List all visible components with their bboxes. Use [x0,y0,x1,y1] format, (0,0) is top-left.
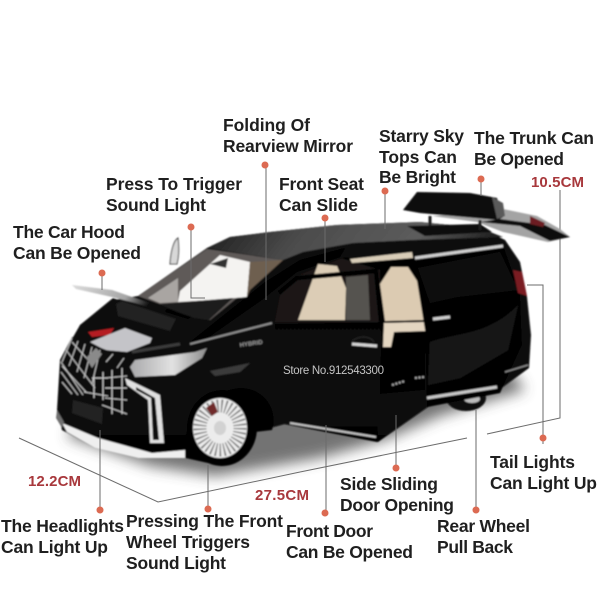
callout: trunk [474,128,594,169]
engine bay [80,298,198,357]
callout: starry sky [379,126,464,187]
callout: folding mirror [223,115,353,156]
rear view mirror patch [210,258,228,268]
callout: starry sky: Tops Can [379,147,457,167]
dimension: width: 12.2CM [28,473,81,490]
callout: front door: Can Be Opened [286,542,413,562]
windshield [138,249,283,320]
callout: front wheel: Sound Light [126,553,226,573]
icon: hybrid badge text: HYBRID [239,340,264,349]
roof [207,222,503,260]
callout: sliding door [340,474,454,515]
leader: hood [98,270,106,290]
front bumper chrome [62,423,185,458]
callout: headlights: Can Light Up [1,537,108,557]
trunk lid [403,192,570,242]
callout: folding mirror: Folding Of [223,115,310,135]
callout: starry sky: Be Bright [379,167,456,187]
fender reflection [210,363,250,376]
hood lid [72,285,192,319]
callout: trunk: The Trunk Can [474,128,594,148]
icon: side mirror folded [170,238,179,264]
dashboard [160,298,233,320]
callout: folding mirror: Rearview Mirror [223,136,353,156]
callout: starry sky: Starry Sky [379,126,464,146]
daytime running light chrome [125,378,164,443]
callout: headlights [1,516,124,557]
callout: press to trigger: Sound Light [106,195,206,215]
front door [272,322,382,442]
leader: starry top [382,188,388,229]
callout: rear wheel: Rear Wheel [437,516,530,536]
dimension: length: 27.5CM [255,487,309,504]
interior opening [340,252,426,394]
callout: front door: Front Door [286,521,373,541]
callout: trunk: Be Opened [474,149,564,169]
leader: sound light [188,224,205,298]
grille [60,337,127,424]
leader: front door [322,425,328,516]
callout: press to trigger: Press To Trigger [106,174,242,194]
callout: tail lights [490,452,597,493]
leader: trunk [478,176,484,196]
callout: front wheel: Pressing The Front [126,511,283,531]
leader: rear wheel [472,410,480,514]
callout: sliding door: Side Sliding [340,474,438,494]
dimension lines [19,190,560,502]
callout: sliding door: Door Opening [340,495,454,515]
windshield reflection [178,255,250,302]
headlight [130,348,207,377]
callout: car hood: Can Be Opened [13,243,141,263]
wheel arch [186,388,273,466]
callout: front wheel [126,511,283,573]
front wheel [187,390,257,466]
roof rail dark panel [407,224,492,236]
callout: car hood: The Car Hood [13,222,125,242]
interior seen through windshield [247,260,283,297]
car body [57,222,531,466]
dimension: height: 10.5CM [531,174,584,191]
callout: rear wheel: Pull Back [437,537,513,557]
callout: front wheel: Wheel Triggers [126,532,250,552]
callout: tail lights: Can Light Up [490,473,597,493]
callout: headlights: The Headlights [1,516,124,536]
callout: front door [286,521,413,562]
leader: tail lights [527,285,546,444]
watermark: Store No.912543300 [283,365,384,377]
rear wheel [446,385,486,411]
leader: front seat [322,214,328,262]
ground shadow [66,370,525,476]
callout: front seat [279,174,364,215]
belt line chrome [190,323,272,344]
side window and seat [275,258,382,322]
callout: tail lights: Tail Lights [490,452,575,472]
rear quarter trim [505,365,528,372]
tail light [513,270,527,296]
leader: mirror [262,162,268,300]
callout: car hood [13,222,141,263]
callout: front seat: Front Seat [279,174,364,194]
a pillar [186,248,345,345]
callout: front seat: Can Slide [279,195,358,215]
leader: front wheel [204,465,212,512]
windshield left reflection [148,278,178,303]
callout: rear wheel [437,516,530,557]
car illustration [56,192,570,466]
callout: press to trigger [106,174,242,215]
sliding door [414,246,522,407]
leader: headlights [96,430,104,514]
leader: sliding door [392,415,400,472]
